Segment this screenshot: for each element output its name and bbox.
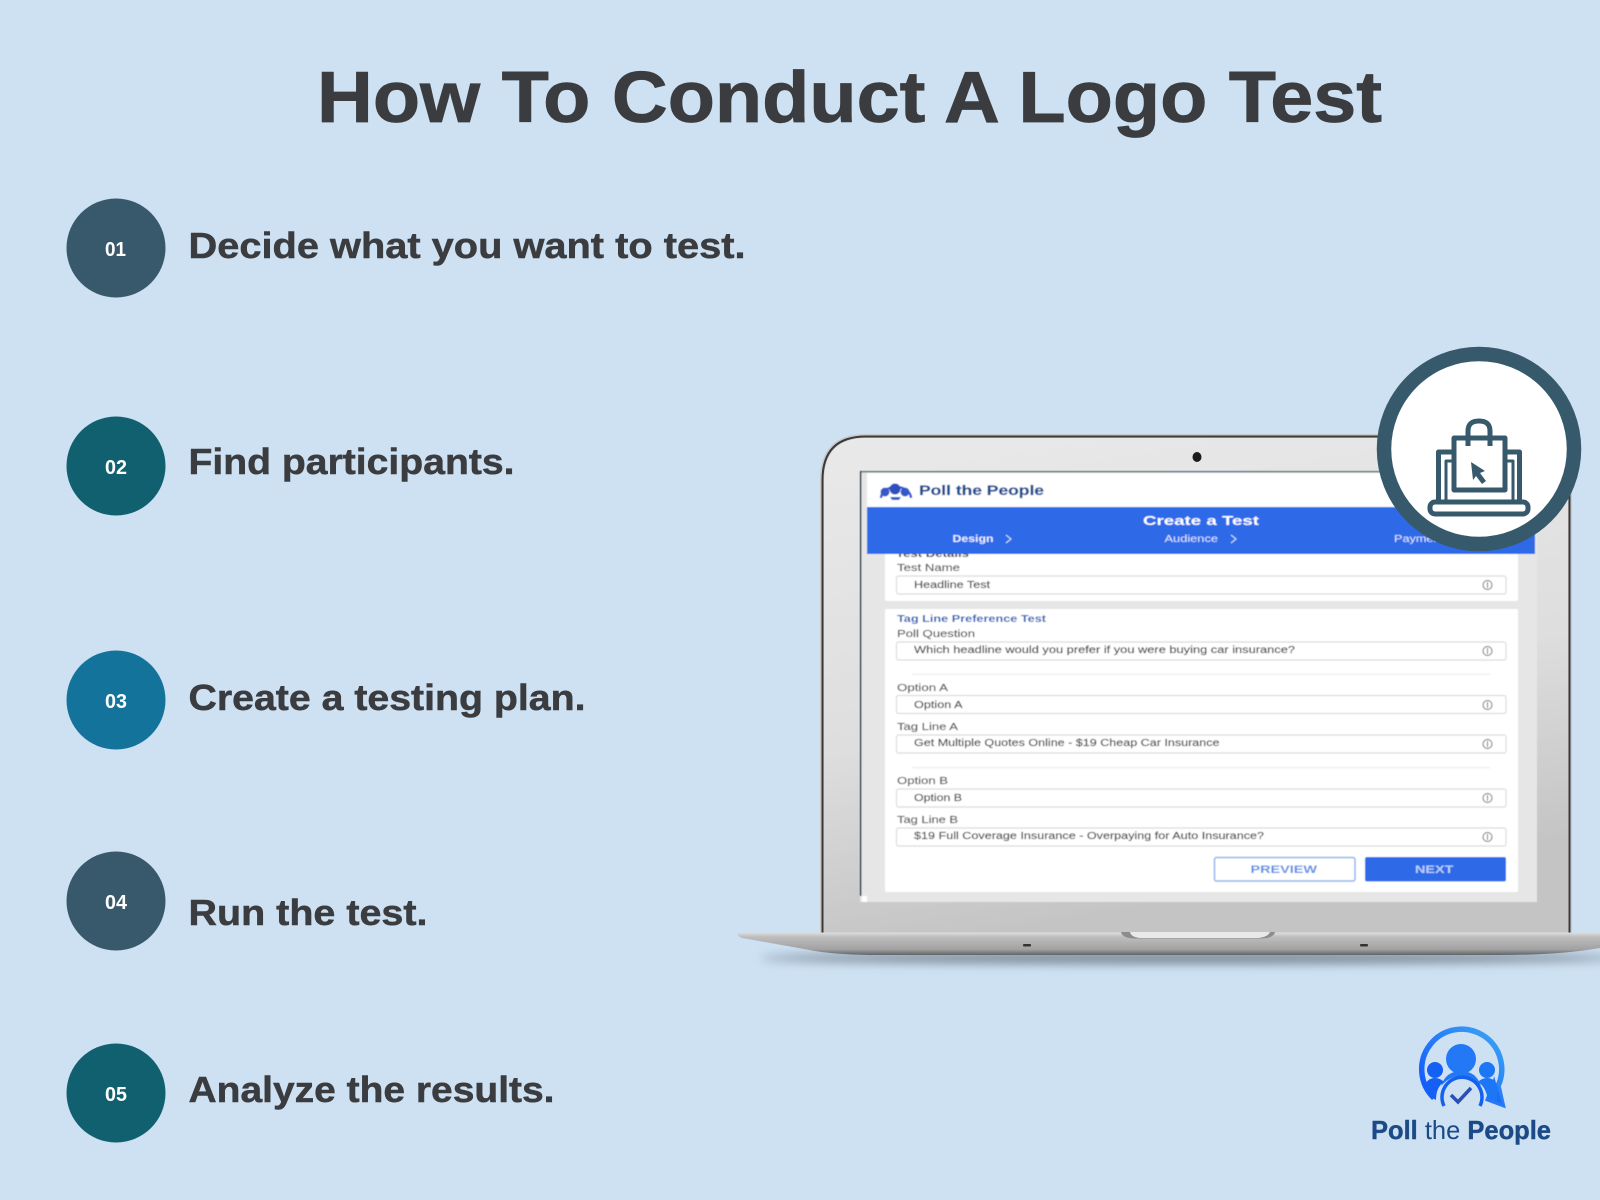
check mark <box>1451 1088 1471 1102</box>
step 1 number badge: 01 <box>105 239 126 261</box>
input: tag line b: $19 Full Coverage Insurance - Overpaying for Auto Insurance? <box>914 831 1265 842</box>
step 3 <box>66 650 586 750</box>
bar heading: Create a Test <box>1143 514 1260 528</box>
step 2 number badge: 02 <box>105 457 127 479</box>
tab: design: Design <box>952 534 994 545</box>
card: tag line preference test <box>885 609 1518 892</box>
check ring <box>1442 1077 1482 1106</box>
step 2 <box>66 416 514 516</box>
tab: audience: Audience <box>1164 534 1219 545</box>
right foot <box>1360 944 1368 946</box>
chevron <box>1006 535 1011 543</box>
badge: shopping bag on laptop icon <box>1384 354 1574 544</box>
chevron <box>1231 535 1236 543</box>
input: option a: Option A <box>914 700 963 711</box>
label: tag line b: Tag Line B <box>897 814 958 826</box>
step 4 text: Run the test. <box>188 892 428 933</box>
camera <box>1192 452 1202 462</box>
input: option a <box>896 696 1506 714</box>
brand logo <box>1371 1029 1551 1145</box>
label: poll question: Poll Question <box>897 628 975 640</box>
laptop illustration <box>737 434 1600 964</box>
left person <box>1424 1062 1444 1100</box>
icon cursor <box>1471 462 1486 484</box>
step 3 number badge <box>66 650 166 750</box>
step 4 <box>66 852 428 950</box>
app screenshot <box>860 471 1537 902</box>
label: option a: Option A <box>897 682 948 694</box>
laptop base <box>737 932 1600 955</box>
step 4 number badge <box>66 852 166 950</box>
step 3 text: Create a testing plan. <box>188 677 586 718</box>
input: test name: Headline Test <box>914 580 990 591</box>
card: test details <box>885 545 1518 601</box>
button: next: NEXT <box>1415 864 1454 876</box>
input: poll question: Which headline would you prefer if you were buying car insurance? <box>914 645 1296 656</box>
icon outline <box>1430 421 1528 514</box>
center person <box>1441 1044 1481 1086</box>
step 2 number badge <box>66 416 166 516</box>
step 5 text: Analyze the results. <box>188 1069 554 1110</box>
card heading: Tag Line Preference Test <box>897 614 1047 625</box>
step 5 number badge: 05 <box>105 1084 127 1106</box>
left foot <box>1023 944 1031 946</box>
badge ring <box>1384 354 1574 544</box>
button: preview <box>1214 858 1355 881</box>
step 3 number badge: 03 <box>105 691 127 713</box>
logo arc <box>1422 1029 1502 1104</box>
step 2 text: Find participants. <box>188 441 514 482</box>
input: option b: Option B <box>914 793 962 804</box>
input: test name <box>896 576 1506 594</box>
label: tag line a: Tag Line A <box>897 721 958 733</box>
logo wordmark: Poll the People <box>1371 1115 1551 1145</box>
step 1 <box>66 198 746 298</box>
step 1 text: Decide what you want to test. <box>188 225 746 266</box>
input: tag line b <box>896 828 1506 846</box>
title: How To Conduct A Logo Test <box>317 58 1382 138</box>
step 5 <box>66 1044 554 1142</box>
app header <box>867 473 1535 507</box>
label: test name: Test Name <box>897 562 960 574</box>
screen background <box>860 471 1537 902</box>
button: preview: PREVIEW <box>1250 864 1318 876</box>
input: option b <box>896 789 1506 807</box>
step 4 number badge: 04 <box>105 892 128 914</box>
hinge notch <box>1121 932 1275 938</box>
app blue bar <box>867 507 1535 554</box>
card: test details: Test Details <box>896 548 969 560</box>
input: tag line a <box>896 735 1506 753</box>
step 5 number badge <box>66 1044 166 1142</box>
logo mark <box>1422 1029 1502 1106</box>
mini logo <box>880 484 911 500</box>
button: next <box>1365 857 1506 882</box>
tab: payment: Payment <box>1394 534 1444 545</box>
right person <box>1478 1062 1498 1100</box>
label: option b: Option B <box>897 775 948 787</box>
step 1 number badge <box>66 198 166 298</box>
app logo text: Poll the People <box>919 483 1045 498</box>
laptop lid <box>820 434 1572 934</box>
input: poll question <box>896 642 1506 660</box>
input: tag line a: Get Multiple Quotes Online - $19 Cheap Car Insurance <box>914 738 1220 749</box>
laptop shadow <box>760 952 1600 964</box>
